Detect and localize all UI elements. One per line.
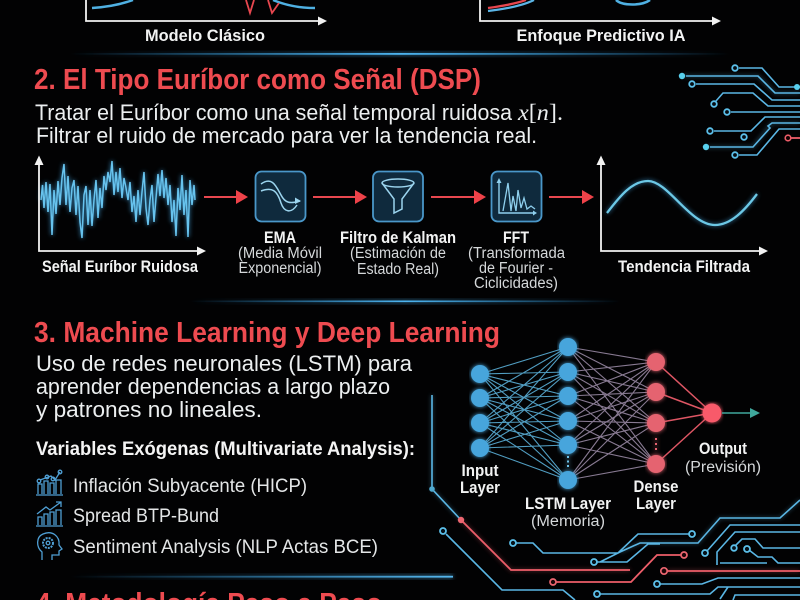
text block: section 3 intro: Uso de redes neuronales (LSTM) para — [36, 351, 412, 376]
label: input layer: Input — [462, 462, 499, 480]
chart: AI predictive approach — [480, 0, 721, 26]
panel: DSP pipeline — [34, 156, 768, 292]
label: Kalman filter: (Estimación de — [350, 245, 446, 262]
label: noisy signal: Señal Euríbor Ruidosa — [42, 258, 199, 276]
panel: section 1 comparison charts (cropped) — [86, 0, 721, 45]
label: FFT: Ciclicidades) — [474, 275, 558, 292]
label: input layer — [460, 462, 501, 497]
list: exogenous variables — [36, 470, 378, 560]
dense layer nodes — [647, 353, 665, 473]
label: filtered trend: Tendencia Filtrada — [618, 258, 751, 276]
input layer nodes — [471, 365, 489, 457]
heading: section 2: 2. El Tipo Euríbor como Señal (DSP) — [34, 64, 481, 96]
label: Kalman filter — [340, 229, 456, 278]
label: Kalman filter: Filtro de Kalman — [340, 229, 456, 247]
label: output — [685, 440, 761, 476]
icon: FFT spectrum — [492, 172, 542, 222]
label: dense layer: Layer — [636, 495, 677, 513]
subheading: exogenous variables: Variables Exógenas (Multivariate Analysis): — [36, 439, 415, 460]
label: dense layer: Dense — [634, 478, 678, 496]
chart: noisy Euribor signal — [34, 156, 206, 256]
text block: section 3 intro: y patrones no lineales. — [36, 397, 262, 422]
label: EMA — [238, 229, 322, 277]
output node and arrow — [702, 404, 760, 422]
LSTM layer nodes — [559, 338, 577, 489]
label: output: Output — [699, 440, 747, 458]
text block: section 2 intro: Filtrar el ruido de mercado para ver la tendencia real. — [36, 123, 537, 148]
text block: section 3 intro: aprender dependencias a largo plazo — [36, 374, 390, 399]
arrow: signal to EMA — [204, 190, 248, 204]
label: EMA: (Media Móvil — [238, 245, 322, 262]
chart: filtered trend — [596, 156, 768, 256]
text block: section 3 intro — [36, 351, 412, 422]
icon: bottom right circuit board — [429, 395, 800, 600]
label: FFT: de Fourier - — [479, 260, 553, 277]
icon: funnel — [373, 172, 423, 222]
icon: top right circuit traces — [679, 65, 800, 158]
label: EMA: EMA — [264, 229, 296, 247]
text: spread: Spread BTP-Bund — [73, 505, 219, 527]
label: input layer: Layer — [460, 479, 501, 497]
text: sentiment: Sentiment Analysis (NLP Actas BCE) — [73, 536, 378, 558]
text block: section 2 intro — [35, 100, 563, 148]
label: LSTM layer: (Memoria) — [531, 513, 605, 530]
arrow: Kalman to FFT — [431, 190, 486, 204]
text block: section 2 intro: Tratar el Euríbor como una señal temporal ruidosa — [35, 100, 512, 125]
label: output: (Previsión) — [685, 459, 761, 476]
arrow: EMA to Kalman — [313, 190, 367, 204]
heading: section 3: 3. Machine Learning y Deep Learning — [34, 317, 500, 349]
icon: EMA — [256, 172, 306, 222]
chart: classic model — [86, 0, 327, 26]
text block: section 2 intro: x[n]. — [517, 100, 563, 125]
connections: dense to output — [656, 362, 712, 464]
chart: neural network — [460, 338, 761, 530]
label: AI predictive approach: Enfoque Predictivo IA — [516, 27, 686, 45]
text: inflation: Inflación Subyacente (HICP) — [73, 475, 307, 497]
arrow: FFT to trend — [549, 190, 594, 204]
connections: input to LSTM — [480, 347, 568, 480]
label: dense layer — [634, 478, 678, 513]
label: FFT — [468, 229, 565, 292]
icon: head with gear — [38, 533, 62, 560]
label: Kalman filter: Estado Real) — [357, 261, 439, 278]
icon: spread chart — [36, 502, 63, 526]
label: classic model: Modelo Clásico — [145, 27, 265, 45]
label: FFT: FFT — [503, 229, 529, 247]
label: FFT: (Transformada — [468, 245, 565, 262]
icon: inflation bars — [36, 470, 63, 495]
label: LSTM layer: LSTM Layer — [525, 495, 612, 513]
label: EMA: Exponencial) — [238, 260, 322, 277]
connections: LSTM to dense — [568, 347, 656, 480]
label: LSTM layer — [525, 495, 612, 530]
